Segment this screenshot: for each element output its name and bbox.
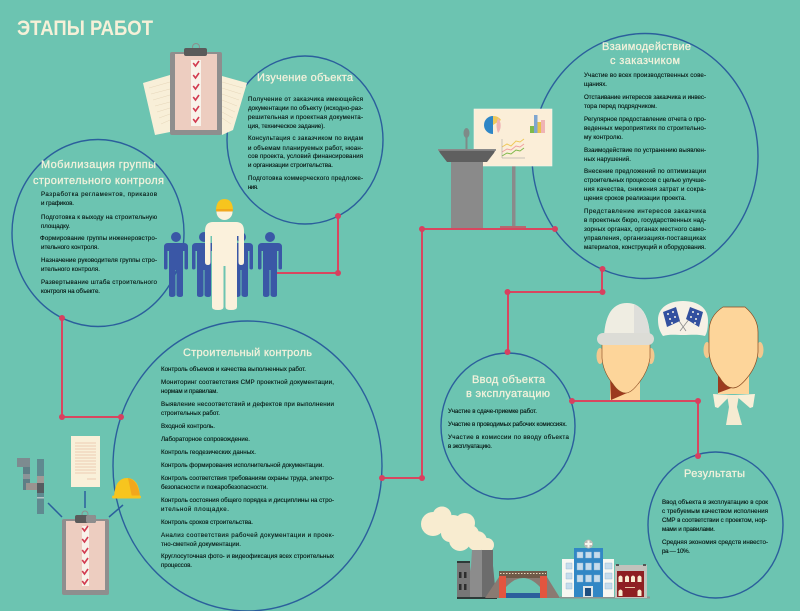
icon: lower clipboard xyxy=(62,511,109,595)
panel: Изучение объекта: ния. xyxy=(248,184,258,191)
panel: Мобилизация группы строительного контроля: и графиков. xyxy=(41,200,74,207)
panel: Мобилизация группы строительного контроля: строительного контроля xyxy=(33,175,164,187)
panel: Мобилизация группы строительного контроля: Мобилизация группы xyxy=(41,159,156,171)
panel: Мобилизация группы строительного контроля: ительного контроля. xyxy=(41,244,99,251)
panel: Мобилизация группы строительного контроля: площадку. xyxy=(41,223,70,230)
panel: Мобилизация группы строительного контроля: Формирование группы инженеровстро- xyxy=(40,235,157,242)
panel: Результаты: Средняя экономия средств инвесто- xyxy=(662,539,768,546)
panel: Результаты xyxy=(648,452,783,598)
panel: Строительный контроль xyxy=(113,321,382,611)
panel: Взаимодействие с заказчиком xyxy=(532,34,758,278)
panel: Взаимодействие с заказчиком: щаниях. xyxy=(584,81,607,88)
cooling tower xyxy=(465,550,496,597)
panel: Ввод объекта в эксплуатацию: Ввод объекта xyxy=(472,374,546,386)
panel: Ввод объекта в эксплуатацию: Участие в сдаче-приемке работ. xyxy=(448,408,537,415)
icon: podium with presentation board xyxy=(438,109,552,229)
panel: Изучение объекта: сов проекта, условий финансирования xyxy=(248,153,363,160)
panel: Ввод объекта в эксплуатацию xyxy=(441,353,575,499)
panel: Ввод объекта в эксплуатацию: Участие в комиссии по вводу объекта xyxy=(448,434,570,441)
panel: Взаимодействие с заказчиком: ния качества, снижения затрат и сокра- xyxy=(584,186,706,193)
panel: Строительный контроль: Контроль сроков строительства. xyxy=(161,519,253,526)
panel: Строительный контроль: Контроль объемов и качества выполненных работ. xyxy=(161,366,306,373)
ground xyxy=(560,596,650,598)
panel: Строительный контроль: Контроль геодезических данных. xyxy=(161,449,256,456)
panel: Взаимодействие с заказчиком: управления, организациях-поставщиках xyxy=(584,235,707,242)
panel: Взаимодействие с заказчиком: зорных органах, органах местного само- xyxy=(584,226,706,233)
bridge xyxy=(485,577,560,598)
panel: Строительный контроль: тно-сметной документации. xyxy=(161,541,241,548)
icon: workers group xyxy=(164,199,282,310)
panel: Строительный контроль: Строительный контроль xyxy=(183,347,312,359)
panel: Взаимодействие с заказчиком: щения сроков реализации проекта. xyxy=(584,195,686,202)
panel: Взаимодействие с заказчиком: Отстаивание интересов заказчика и инвес- xyxy=(584,94,706,101)
panel: Строительный контроль: ительной площадке. xyxy=(161,506,229,513)
panel: Результаты: с требуемым качеством исполнения xyxy=(662,508,768,515)
line chart xyxy=(502,139,525,158)
panel: Взаимодействие с заказчиком: тора перед подрядчиком. xyxy=(584,103,657,110)
panel: Изучение объекта: Подготовка коммерческого предложе- xyxy=(248,175,363,182)
panel: Строительный контроль: Круглосуточная фото- и видеофиксация всех строительных xyxy=(161,553,335,560)
panel: Результаты: СМР в соответствии с проектом, нор- xyxy=(662,517,767,524)
panel: Строительный контроль: Лабораторное сопровождение. xyxy=(161,436,250,443)
panel: Строительный контроль: Контроль формирования исполнительной документации. xyxy=(161,462,324,469)
panel: Взаимодействие с заказчиком: материалов, конструкций и оборудования. xyxy=(584,244,706,251)
panel: Строительный контроль: Выявление несоответствий и дефектов при выполнении xyxy=(161,401,335,408)
panel: Изучение объекта: Консультация с заказчиком по видам xyxy=(248,135,363,142)
panel: Результаты: ра — 10%. xyxy=(662,548,690,555)
panel: Взаимодействие с заказчиком: с заказчиком xyxy=(610,55,680,67)
panel: Изучение объекта: решительная и проектная документа- xyxy=(248,114,363,121)
panel: Взаимодействие с заказчиком: строительных процессов с целью улучше- xyxy=(584,177,706,184)
panel: Изучение объекта: Получение от заказчика имеющейся xyxy=(248,96,363,103)
panel: Ввод объекта в эксплуатацию: в эксплуатацию xyxy=(466,388,550,400)
panel: Ввод объекта в эксплуатацию: Участие в проводимых рабочих комиссиях. xyxy=(448,421,567,428)
panel: Изучение объекта: и объемам планируемых работ, нюан- xyxy=(248,145,363,152)
bar chart xyxy=(530,115,545,133)
panel: Строительный контроль: Контроль соответствия требованиям охраны труда, электро- xyxy=(161,475,334,482)
panel: Мобилизация группы строительного контроля xyxy=(12,140,184,326)
panel: Взаимодействие с заказчиком: в проектных бюро, государственных над- xyxy=(584,217,706,224)
panel: Изучение объекта: ция, техническое задание). xyxy=(248,123,325,130)
icon: pipes xyxy=(17,458,44,514)
panel: Строительный контроль: Входной контроль. xyxy=(161,423,215,430)
panel: Мобилизация группы строительного контроля: Разработка регламентов, приказов xyxy=(41,191,158,198)
panel: Взаимодействие с заказчиком: веденных мероприятиях по строительно- xyxy=(584,125,706,132)
panel: Взаимодействие с заказчиком: Представление интересов заказчика xyxy=(584,208,707,215)
panel: Взаимодействие с заказчиком: Взаимодействие xyxy=(602,41,691,53)
panel: Результаты: мами и правилами. xyxy=(662,526,715,533)
title: ЭТАПЫ РАБОТ xyxy=(17,17,153,40)
panel: Взаимодействие с заказчиком: Участие во всех производственных сове- xyxy=(584,72,706,79)
panel: Строительный контроль: Контроль состояния общего порядка и дисциплины на стро- xyxy=(161,497,334,504)
panel: Изучение объекта xyxy=(227,56,383,224)
panel: Строительный контроль: нормам и правилам. xyxy=(161,388,218,395)
connector ticks: icons to clipboard xyxy=(48,491,123,517)
icon: document xyxy=(71,436,100,487)
icon: clipboard with documents xyxy=(143,44,247,135)
panel: Взаимодействие с заказчиком: Внесение предложений по оптимизации xyxy=(584,168,707,175)
smoke cloud xyxy=(421,506,494,552)
icon: city buildings xyxy=(421,506,650,599)
panel: Изучение объекта: документации по объекту (исходно-раз- xyxy=(248,105,363,112)
panel: Мобилизация группы строительного контроля: Назначение руководителя группы стро- xyxy=(41,257,157,264)
panel: Изучение объекта: и организации строительства. xyxy=(248,162,333,169)
icon: man in white hard hat xyxy=(596,303,654,400)
panel: Изучение объекта: Изучение объекта xyxy=(257,72,354,84)
panel: Мобилизация группы строительного контроля: Развертывание штаба строительного xyxy=(41,279,158,286)
red building xyxy=(615,565,647,598)
icon: yellow hard hat xyxy=(112,478,141,498)
panel: Ввод объекта в эксплуатацию: в эксплуатацию. xyxy=(448,443,492,450)
panel: Взаимодействие с заказчиком: му контролю. xyxy=(584,134,623,141)
panel: Результаты: Результаты xyxy=(684,468,745,480)
connector lines xyxy=(59,213,701,481)
panel: Мобилизация группы строительного контроля: Подготовка к выходу на строительную xyxy=(41,214,157,221)
icon: man with tie xyxy=(704,307,764,425)
panel: Строительный контроль: процессов. xyxy=(161,562,192,569)
panel: Мобилизация группы строительного контроля: контроля на объекте. xyxy=(41,288,100,295)
panel: Строительный контроль: безопасности и пожаробезопасности. xyxy=(161,484,268,491)
panel: Взаимодействие с заказчиком: Взаимодействие по устранению выявлен- xyxy=(584,147,706,154)
icon: speech bubble with flags xyxy=(658,301,708,336)
panel: Взаимодействие с заказчиком: ных нарушений. xyxy=(584,156,631,163)
panel: Строительный контроль: Мониторинг соответствия СМР проектной документации, xyxy=(161,379,334,386)
pie chart xyxy=(484,116,501,134)
hospital xyxy=(562,559,614,597)
panel: Взаимодействие с заказчиком: Регулярное предоставление отчета о про- xyxy=(584,116,706,123)
panel: Строительный контроль: Анализ соответствия рабочей документации и проек- xyxy=(161,532,334,539)
panel: Результаты: Ввод объекта в эксплуатацию в срок xyxy=(662,499,768,506)
panel: Мобилизация группы строительного контроля: ительного контроля. xyxy=(41,266,100,273)
panel: Строительный контроль: строительных работ. xyxy=(161,410,220,417)
